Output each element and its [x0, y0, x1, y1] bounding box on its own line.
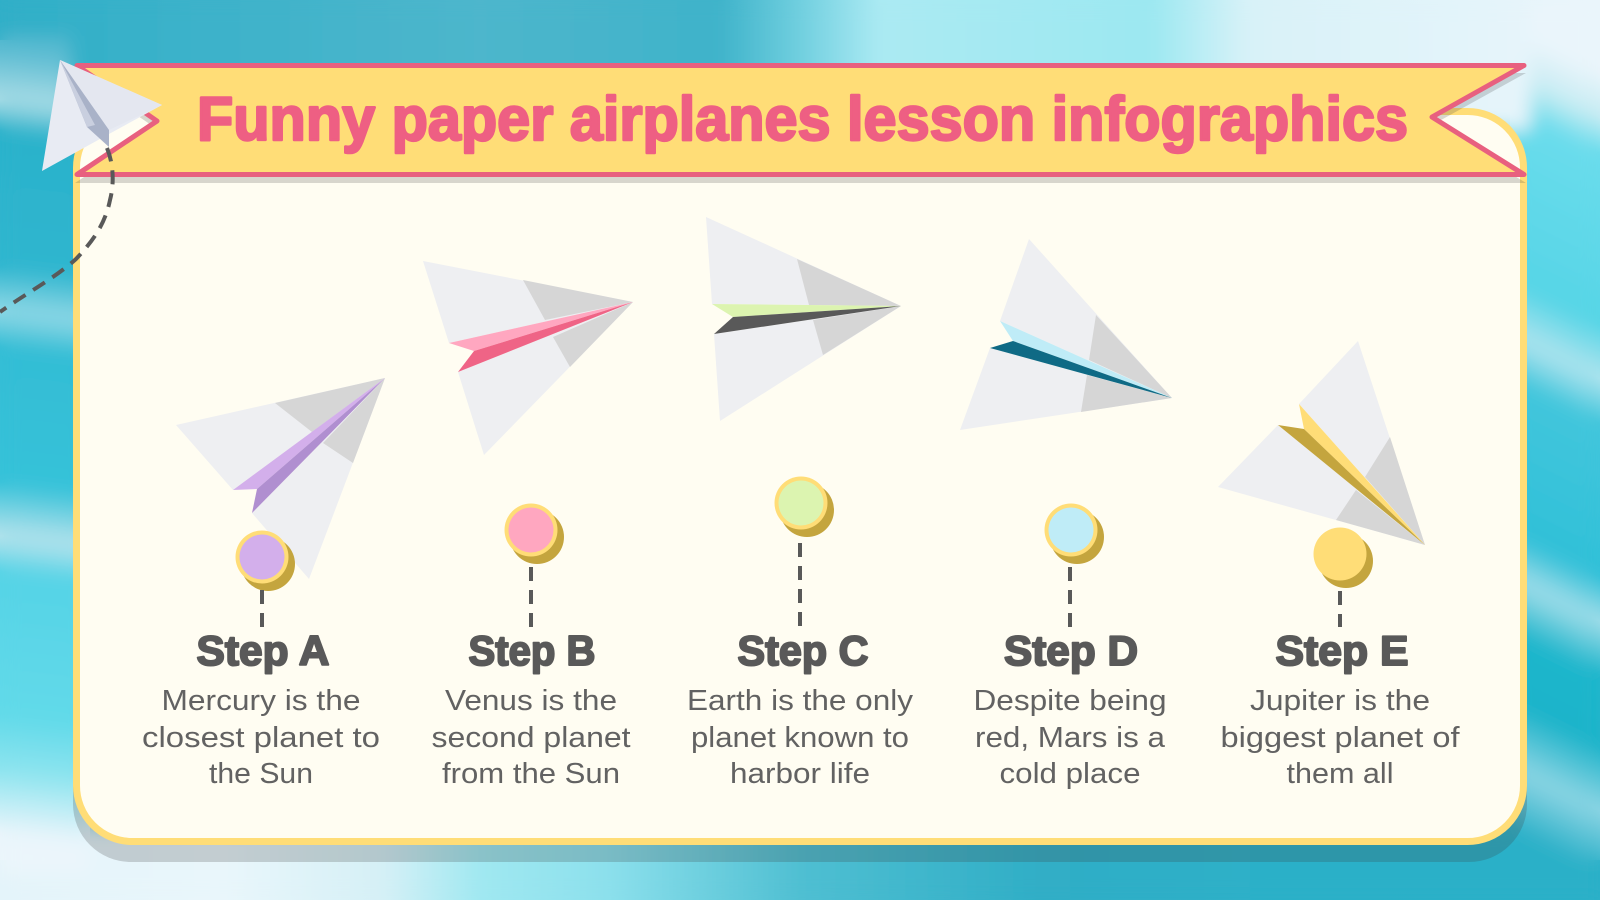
connector [1338, 591, 1342, 627]
icon: pink paper airplane [423, 261, 633, 455]
marker: pink dot [504, 504, 564, 564]
dashed flight path [0, 148, 113, 312]
icon: blue paper airplane [960, 239, 1172, 430]
text: Jupiter [1220, 685, 1461, 790]
text: Earth [687, 685, 914, 790]
connector [529, 567, 533, 627]
heading: Step C: Step C [738, 627, 868, 674]
text: Mars: cold place [1000, 758, 1140, 790]
text: Venus: from the Sun [442, 758, 620, 790]
text: Venus: second planet [432, 722, 630, 754]
text: Jupiter: them all [1286, 758, 1394, 790]
banner shadow [75, 73, 1526, 183]
panel: main cream card [76, 112, 1524, 842]
icon: green paper airplane [706, 217, 901, 421]
text: Jupiter: biggest planet of [1220, 722, 1461, 754]
text: Earth: planet known to [691, 722, 909, 754]
text: Venus [432, 685, 630, 790]
heading: Step E: Step E [1276, 627, 1408, 674]
heading: Step A: Step A [196, 627, 330, 674]
text: Mercury [142, 685, 380, 790]
step A [142, 378, 385, 790]
icon: banner paper airplane [42, 60, 162, 171]
marker: green dot [774, 476, 834, 537]
step D [960, 239, 1172, 790]
connector [798, 543, 802, 627]
banner ribbon [77, 66, 1524, 174]
icon: yellow paper airplane [1218, 341, 1425, 545]
step B [423, 261, 633, 790]
text: Earth: harbor life [730, 758, 870, 790]
step E [1218, 341, 1461, 790]
title: Funny paper airplanes lesson infographics [197, 85, 1408, 154]
marker: purple dot [236, 530, 295, 591]
step C [687, 217, 914, 790]
heading: Step B: Step B [468, 627, 596, 674]
heading: Step D: Step D [1004, 627, 1138, 674]
text: Jupiter: Jupiter is the [1250, 685, 1430, 717]
marker: yellow dot [1314, 528, 1373, 588]
text: Mars: red, Mars is a [975, 722, 1166, 754]
text: Mercury: closest planet to [142, 722, 380, 754]
text: Mars: Despite being [974, 685, 1166, 717]
icon: purple paper airplane [176, 378, 385, 579]
text: Mercury: Mercury is the [162, 685, 360, 717]
text: Earth: Earth is the only [687, 685, 914, 717]
connector [1068, 567, 1072, 627]
connector [260, 590, 264, 627]
text: Mars [974, 685, 1166, 790]
panel: card shadow [73, 125, 1527, 862]
marker: blue dot [1044, 504, 1104, 564]
text: Venus: Venus is the [445, 685, 617, 717]
text: Mercury: the Sun [209, 758, 313, 790]
